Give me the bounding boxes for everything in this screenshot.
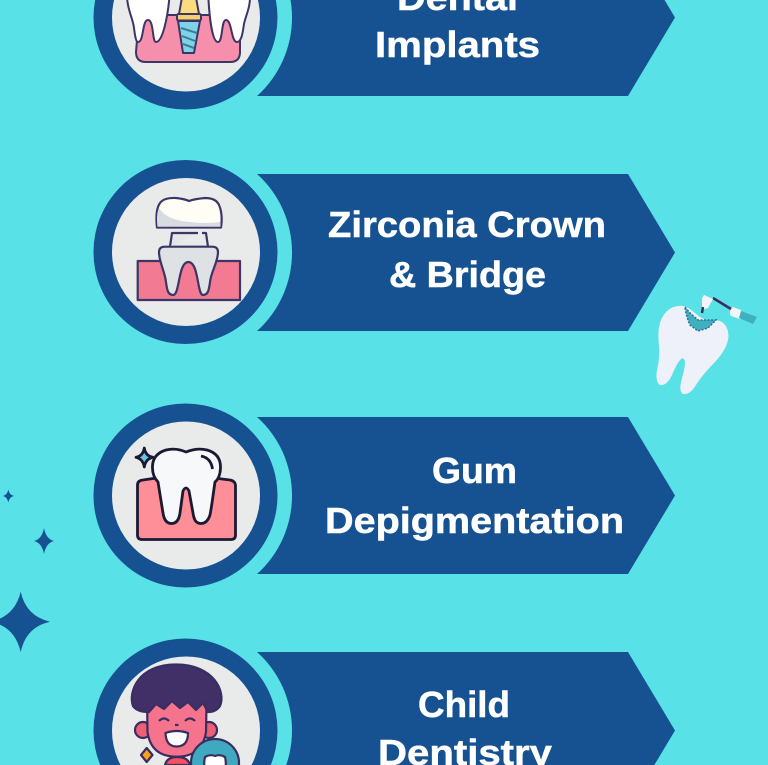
label: dental implants: Implants — [375, 24, 540, 65]
label: dental implants — [375, 0, 540, 65]
decorative star medium — [34, 528, 54, 554]
panel: gum depigmentation — [94, 404, 675, 588]
banner: zirconia crown — [257, 174, 675, 331]
label: gum depigmentation: Depigmentation — [325, 500, 624, 541]
panel: child dentistry — [94, 638, 675, 765]
panel: dental implants — [94, 0, 675, 110]
badge ring: gum depigmentation — [94, 404, 278, 588]
banner: gum depigmentation — [257, 417, 675, 574]
label: gum depigmentation: Gum — [432, 450, 517, 491]
label: gum depigmentation — [325, 450, 624, 541]
decorative star large — [0, 592, 50, 652]
badge ring: child dentistry — [94, 638, 278, 765]
badge ring: zirconia crown — [94, 160, 278, 344]
label: child dentistry: Child — [418, 684, 510, 725]
label: child dentistry — [378, 684, 552, 765]
panel: zirconia crown and bridge — [94, 160, 675, 344]
icon: smiling child — [132, 664, 239, 765]
banner: dental implants — [257, 0, 675, 96]
badge disc: child dentistry — [112, 656, 260, 765]
badge disc: dental implants — [112, 0, 260, 92]
label: zirconia crown and bridge: Zirconia Crown — [328, 204, 606, 245]
icon: tooth with dental drill — [656, 295, 757, 394]
badge disc: zirconia crown — [112, 178, 260, 326]
icon: dental implant — [127, 0, 250, 62]
badge disc: gum depigmentation — [112, 422, 260, 570]
icon: crown over tooth — [138, 198, 240, 300]
decorative star small — [3, 490, 14, 502]
label: zirconia crown and bridge — [328, 204, 606, 295]
label: zirconia crown and bridge: & Bridge — [389, 254, 546, 295]
badge ring: dental implants — [94, 0, 278, 110]
banner: child dentistry — [257, 652, 675, 765]
icon: healthy gum and tooth — [136, 448, 236, 540]
